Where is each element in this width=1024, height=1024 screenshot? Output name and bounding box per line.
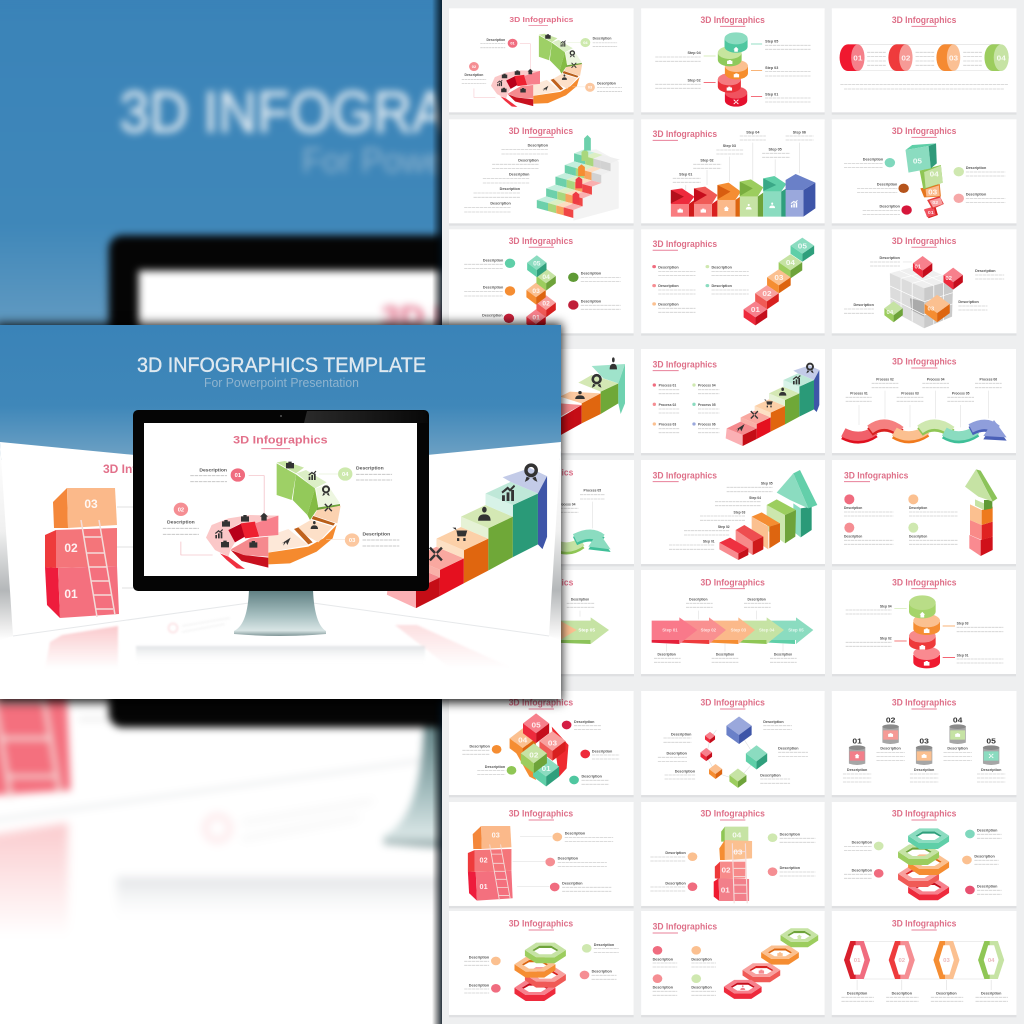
- process list: Process 01: [659, 384, 676, 388]
- bulleted descriptions: Description: [658, 266, 679, 270]
- grey staircase with coloured risers: [537, 135, 620, 221]
- process labels: Process 05: [952, 391, 970, 395]
- step labels: Step 03: [765, 66, 778, 70]
- callout 03: [326, 532, 399, 547]
- numbered spools: [849, 716, 999, 765]
- panel: slide vertical hexes: [832, 911, 1016, 1017]
- grey cube with coloured corner cubes: 04: [887, 310, 894, 316]
- stacked hexagons: [514, 943, 566, 1001]
- panel: slide arrow partially hidden: [449, 570, 634, 676]
- labelled badges: Description: [966, 166, 986, 170]
- arrow chain: [652, 617, 813, 644]
- labelled badges: Description: [880, 205, 900, 209]
- labelled badges: Description: [565, 832, 585, 836]
- step descriptions: Description: [518, 158, 539, 162]
- tumbling cubes: 05: [913, 157, 923, 166]
- wave arrow: [843, 420, 1007, 441]
- labelled badges: [513, 832, 613, 891]
- ascending iso cubes: [744, 238, 814, 325]
- title: 3D Infographics: [653, 239, 717, 250]
- panel: slide hex stack: [832, 802, 1016, 908]
- grey cube with coloured corner cubes: 03: [928, 307, 934, 313]
- arrow chain: Step 01: [662, 628, 678, 633]
- stacked cylinders: [718, 32, 748, 107]
- spiral slide on screen: [163, 433, 399, 569]
- labelled badges: Description: [483, 286, 503, 290]
- labelled badges: Description: [877, 183, 897, 187]
- process labels: Process 04: [927, 378, 945, 382]
- labelled badges: Description: [574, 720, 594, 724]
- title: 3D Infographics: [892, 356, 956, 366]
- panel: slide arrow tower: [832, 460, 1016, 566]
- labelled badges: Description: [974, 855, 995, 859]
- title: 3D Infographics: [653, 129, 717, 140]
- step labels: Step 06: [793, 130, 806, 134]
- shield of cubes: 05: [532, 721, 541, 730]
- ladder box stack: [45, 488, 119, 618]
- title: 3D Infographics: [892, 236, 956, 247]
- numbered spools: 02: [886, 716, 896, 725]
- callout 03: Description: [363, 532, 390, 538]
- ascending iso cubes: 05: [798, 242, 808, 250]
- labelled badges: [844, 158, 1005, 215]
- labelled badges: [464, 258, 621, 323]
- badges and descriptions: Description: [844, 534, 862, 538]
- descriptions: Description: [914, 768, 934, 772]
- process list: [653, 383, 719, 433]
- panel: slide stairs partially hidden: [449, 349, 634, 455]
- numbered spools: 05: [986, 737, 996, 746]
- step labels: Step 04: [746, 130, 759, 134]
- slide thumbnails, rows 4 to 6: [449, 349, 1016, 676]
- step labels: Step 01: [679, 172, 692, 176]
- title: 3D Infographics: [892, 15, 956, 26]
- title: 3D Infographics: [653, 922, 717, 932]
- labels: Description: [689, 597, 707, 601]
- vertical hexagon row: 03: [943, 958, 950, 964]
- step labels: Step 03: [957, 622, 969, 626]
- description: [567, 597, 594, 617]
- step labels: Step 02: [687, 78, 701, 82]
- left wing slide: [0, 442, 135, 636]
- process list: Process 04: [698, 384, 716, 388]
- descriptions: Description: [847, 768, 867, 772]
- panel: slide process arrows: [641, 570, 825, 676]
- labelled badges: Description: [592, 749, 612, 753]
- process list: Process 06: [698, 423, 716, 427]
- hero title: 3D INFOGRAPHICS TEMPLATE: [137, 353, 426, 377]
- labelled badges: [844, 829, 1002, 894]
- shield of cubes: 04: [518, 736, 528, 745]
- ascending iso cubes: 03: [774, 273, 784, 282]
- panel: hero mockup: [0, 325, 561, 699]
- labels: Description: [716, 652, 734, 656]
- horizontal discs: 03: [949, 54, 959, 62]
- process list: Process 05: [698, 403, 716, 407]
- numbered spools: 04: [953, 716, 963, 725]
- panel: slide big grey cube: [832, 229, 1016, 336]
- shield of cubes: [510, 713, 568, 786]
- title: 3D Infographics: [509, 919, 573, 929]
- step labels: Step 04: [880, 604, 892, 608]
- descriptions: Description: [892, 991, 912, 995]
- callout 01: [190, 468, 264, 513]
- descriptions: Description: [947, 747, 968, 751]
- process labels: Process 06: [980, 378, 997, 382]
- shield of cubes: 02: [529, 751, 539, 760]
- callouts: Description: [880, 256, 900, 260]
- labelled badges: [462, 720, 619, 784]
- slide thumbnails, rows 7 to 9: [449, 691, 1016, 1017]
- labelled badges: Description: [558, 857, 578, 861]
- title: 3D Infographics: [509, 809, 573, 819]
- title: 3D Infographics: [509, 236, 573, 247]
- title: 3D Infographics: [653, 470, 717, 480]
- panel: slide cylinders: [641, 8, 825, 115]
- wing slide title: 3D Infographics: [103, 462, 194, 476]
- grey cube with coloured corner cubes: 02: [945, 276, 952, 282]
- badges and descriptions: [844, 494, 958, 544]
- staircase with icons: [726, 363, 819, 446]
- title: 3D Infographics: [892, 919, 956, 929]
- process labels: Process 03: [901, 391, 919, 395]
- step labels: Step 01: [765, 92, 778, 96]
- labelled badges: Description: [780, 866, 800, 870]
- labelled badges: [650, 832, 815, 891]
- step descriptions: Description: [528, 144, 548, 148]
- process labels: [846, 378, 1002, 427]
- four stacked boxes: [714, 827, 752, 903]
- step labels: Step 03: [733, 511, 745, 515]
- tumbling cubes: [906, 143, 944, 218]
- step labels: Step 05: [765, 40, 778, 44]
- callout 03: 03: [349, 538, 355, 544]
- title: 3D Infographics: [700, 698, 765, 708]
- callouts: Description: [958, 300, 979, 304]
- vertical hexagon row: [844, 941, 1004, 979]
- step labels: [655, 40, 811, 102]
- four stacked boxes: 01: [721, 886, 731, 895]
- panel: slide staircase: [449, 119, 634, 226]
- vertical hexagon row: 02: [898, 958, 905, 964]
- descriptions: Description: [936, 991, 957, 995]
- panel: slide shield cubes: [449, 691, 634, 797]
- descriptions: [843, 747, 1005, 782]
- ascending iso cubes: 01: [751, 305, 761, 314]
- spiral infographic: [462, 15, 622, 107]
- labelled badges: Description: [582, 775, 602, 779]
- descriptions: Description: [675, 769, 695, 773]
- screen title: 3D Infographics: [233, 433, 328, 447]
- panel: slide dice ring: [641, 691, 825, 797]
- rising blocks and arrow: [719, 470, 817, 560]
- stacked hexagons: [898, 828, 949, 900]
- bulleted descriptions: [652, 265, 749, 312]
- panel: slide horizontal cylinders: [832, 8, 1016, 115]
- descriptions: Description: [981, 768, 1001, 772]
- descriptions: [658, 720, 808, 783]
- arrow chain: Step 03: [731, 628, 747, 633]
- labelled badges: Description: [966, 193, 986, 197]
- right wing slide: [427, 442, 561, 636]
- badges and descriptions: Description: [844, 506, 862, 510]
- badges: Description: [691, 957, 712, 961]
- badges: Description: [691, 986, 712, 990]
- process labels: Process 02: [876, 378, 894, 382]
- step descriptions: Description: [509, 173, 529, 177]
- descriptions: Description: [763, 720, 784, 724]
- title: 3D Infographics: [892, 809, 956, 819]
- bulleted descriptions: Description: [711, 284, 732, 288]
- panel: slide ascending cubes: [641, 229, 825, 336]
- descriptions: Description: [847, 991, 867, 995]
- labelled badges: Description: [485, 765, 505, 769]
- labelled badges: Description: [665, 881, 686, 885]
- callout 04: [319, 465, 392, 481]
- ladder box stack: 03: [84, 497, 98, 511]
- panel: slide cylinder tower: [832, 570, 1016, 676]
- labelled badges: Description: [852, 868, 872, 872]
- labelled badges: Description: [562, 882, 583, 886]
- title: 3D Infographics: [700, 809, 765, 819]
- monitor screen: [144, 423, 417, 576]
- title: 3D Infographics: [892, 577, 956, 587]
- arrow tail: [553, 617, 609, 644]
- labels: [654, 597, 797, 662]
- dice ring: [700, 716, 767, 788]
- labelled badges: Description: [483, 258, 503, 262]
- tumbling cubes: 03: [928, 188, 938, 196]
- spiral chart: [206, 461, 341, 569]
- process labels: Process 04: [558, 503, 576, 507]
- labelled badges: [464, 943, 619, 993]
- panel: slide growth blocks: [641, 460, 825, 566]
- arrow tower: [965, 469, 997, 556]
- panel: slide ladder stack: [449, 802, 634, 908]
- shield of cubes: 01: [542, 764, 551, 773]
- title: 3D Infographics: [509, 467, 573, 477]
- panel: slide spools: [832, 691, 1016, 797]
- arrow chain: Step 05: [788, 628, 804, 633]
- panel: slide ascending hexes: [641, 911, 825, 1017]
- panel: slide spiral: [449, 8, 634, 115]
- badges: Description: [653, 957, 673, 961]
- monitor stand: [234, 590, 326, 636]
- callout 02: Description: [167, 520, 195, 526]
- title: 3D Infographics: [700, 577, 765, 587]
- labelled badges: Description: [482, 313, 503, 317]
- panel: slide four hexes: [449, 911, 634, 1017]
- process list: Process 02: [659, 403, 676, 407]
- panel: slide wave partially hidden: [449, 460, 634, 566]
- labelled badges: Description: [977, 829, 997, 833]
- callouts: Description: [853, 303, 874, 307]
- bulleted descriptions: Description: [658, 284, 679, 288]
- badges: [653, 946, 716, 995]
- zigzag cubes: 01: [532, 315, 540, 322]
- step descriptions: [464, 144, 548, 212]
- process list: Process 03: [659, 423, 676, 427]
- title: 3D Infographics: [509, 126, 573, 137]
- horizontal discs: [840, 44, 1009, 71]
- bulleted descriptions: Description: [658, 302, 679, 306]
- zigzag cubes: 02: [542, 301, 550, 308]
- numbered spools: 03: [919, 737, 929, 746]
- numbered spools: 01: [852, 737, 862, 746]
- process labels: Process 05: [584, 489, 601, 493]
- title: 3D Infographics: [892, 126, 956, 137]
- horizontal discs: 01: [853, 54, 863, 62]
- panel: slide cube chain: [832, 119, 1016, 226]
- labelled badges: Description: [863, 158, 883, 162]
- descriptions: Description: [667, 752, 687, 756]
- zigzag cubes: [526, 255, 556, 331]
- callout 02: 02: [178, 507, 184, 513]
- vertical hexagon row: 01: [854, 958, 860, 964]
- step descriptions: Description: [500, 187, 520, 191]
- monitor frame: [133, 410, 429, 591]
- step labels: Step 01: [703, 539, 715, 543]
- grey cube with coloured corner cubes: 01: [914, 265, 921, 270]
- arrow chain: Step 04: [759, 628, 775, 633]
- step labels: Step 02: [718, 525, 730, 529]
- labelled badges: Description: [665, 851, 686, 855]
- panel: slide stairs with processes: [641, 349, 825, 455]
- shield of cubes: 03: [548, 739, 558, 747]
- descriptions: Description: [981, 991, 1001, 995]
- labelled badges: Description: [581, 299, 601, 303]
- step labels: Step 05: [769, 147, 782, 151]
- step labels: Step 02: [880, 637, 892, 641]
- callout 01: 01: [235, 473, 241, 479]
- callout 04: 04: [342, 472, 349, 478]
- cylinders: [909, 595, 940, 668]
- blurred enlarged hero backdrop: [0, 0, 442, 1024]
- ascending hexagons: [724, 928, 818, 999]
- hero shadow: [0, 323, 562, 703]
- labelled badges: Description: [469, 956, 489, 960]
- title: 3D Infographics: [844, 470, 908, 480]
- wave tail: [553, 532, 611, 552]
- labelled badges: Description: [594, 943, 614, 947]
- step labels: Step 03: [723, 144, 736, 148]
- horizontal discs: 02: [901, 54, 911, 62]
- four stacked boxes: 02: [721, 866, 731, 875]
- ascending iso cubes: 02: [762, 289, 772, 298]
- badges and descriptions: Description: [909, 506, 927, 510]
- callout 02: [163, 503, 213, 555]
- four stacked boxes: 03: [733, 848, 743, 856]
- badges and descriptions: Description: [909, 534, 927, 538]
- arrow chain: Step 02: [701, 628, 717, 633]
- step descriptions: Description: [490, 202, 511, 206]
- title: 3D Infographics: [509, 577, 573, 587]
- bulleted descriptions: Description: [711, 266, 732, 270]
- step labels: [673, 130, 814, 190]
- step labels: [669, 482, 773, 549]
- badges: Description: [653, 986, 673, 990]
- tumbling cubes: 02: [932, 200, 938, 206]
- panel: slide iso cube zigzag: [449, 229, 634, 336]
- step labels: Step 02: [700, 158, 714, 162]
- process labels: Process 01: [850, 391, 868, 395]
- large staircase: [540, 357, 625, 447]
- tumbling cubes: 04: [930, 170, 939, 179]
- left wing connectors: [112, 507, 133, 588]
- horizontal discs: 04: [997, 54, 1006, 62]
- zigzag cubes: 04: [542, 274, 550, 281]
- labels: Description: [774, 652, 792, 656]
- step labels: Step 01: [957, 653, 969, 657]
- four stacked boxes: 04: [732, 831, 742, 840]
- tumbling cubes: 01: [928, 210, 934, 216]
- step labels: Step 05: [761, 482, 773, 486]
- labelled badges: Description: [469, 983, 489, 987]
- ascending iso cubes: 04: [786, 258, 796, 267]
- callouts: Description: [975, 269, 996, 273]
- right wing stairs: [387, 463, 547, 608]
- title: 3D Infographics: [700, 15, 765, 26]
- labels: Description: [748, 597, 766, 601]
- title: 3D Infographics: [509, 698, 573, 708]
- labelled badges: Description: [592, 969, 612, 973]
- ladder box stack: 02: [64, 541, 78, 555]
- labelled badges: Description: [977, 885, 997, 889]
- descriptions: Description: [671, 732, 691, 736]
- labelled badges: Description: [852, 841, 872, 845]
- panel: slide four box ladder: [641, 802, 825, 908]
- hero subtitle: For Powerpoint Presentation: [204, 375, 359, 390]
- vertical hexagon row: 04: [988, 958, 995, 964]
- title: 3D Infographics: [892, 698, 956, 708]
- step labels: Step 04: [687, 51, 701, 55]
- descriptions: Description: [778, 746, 799, 750]
- process labels: [553, 489, 605, 528]
- descriptions: Description: [760, 773, 781, 777]
- labelled badges: Description: [780, 832, 800, 836]
- arrow tail: Step 05: [578, 628, 595, 633]
- description: Description: [571, 597, 589, 601]
- title: 3D Infographics: [653, 359, 717, 369]
- grey cube with coloured corner cubes: [884, 256, 963, 328]
- arrow blocks chart: [671, 174, 815, 217]
- panel: slide wave: [832, 349, 1016, 455]
- zigzag cubes: 03: [532, 288, 540, 295]
- descriptions: Description: [880, 747, 901, 751]
- labelled badges: Description: [581, 272, 601, 276]
- floor reflections: [45, 618, 512, 668]
- labelled badges: Description: [470, 745, 490, 749]
- step labels: Step 04: [749, 496, 761, 500]
- stacked boxes with ladder: [468, 826, 513, 901]
- callout 04: Description: [356, 465, 384, 471]
- step labels: [846, 604, 1003, 663]
- callouts: [844, 256, 1004, 313]
- ladder box stack: 01: [64, 587, 78, 601]
- zigzag cubes: 05: [533, 261, 541, 268]
- labels: Description: [658, 652, 676, 656]
- callout 01: Description: [199, 468, 227, 474]
- panel: slide arrow blocks: [641, 119, 825, 226]
- slide thumbnails, rows 1 to 3: [449, 8, 1016, 336]
- descriptions: [841, 980, 1008, 1001]
